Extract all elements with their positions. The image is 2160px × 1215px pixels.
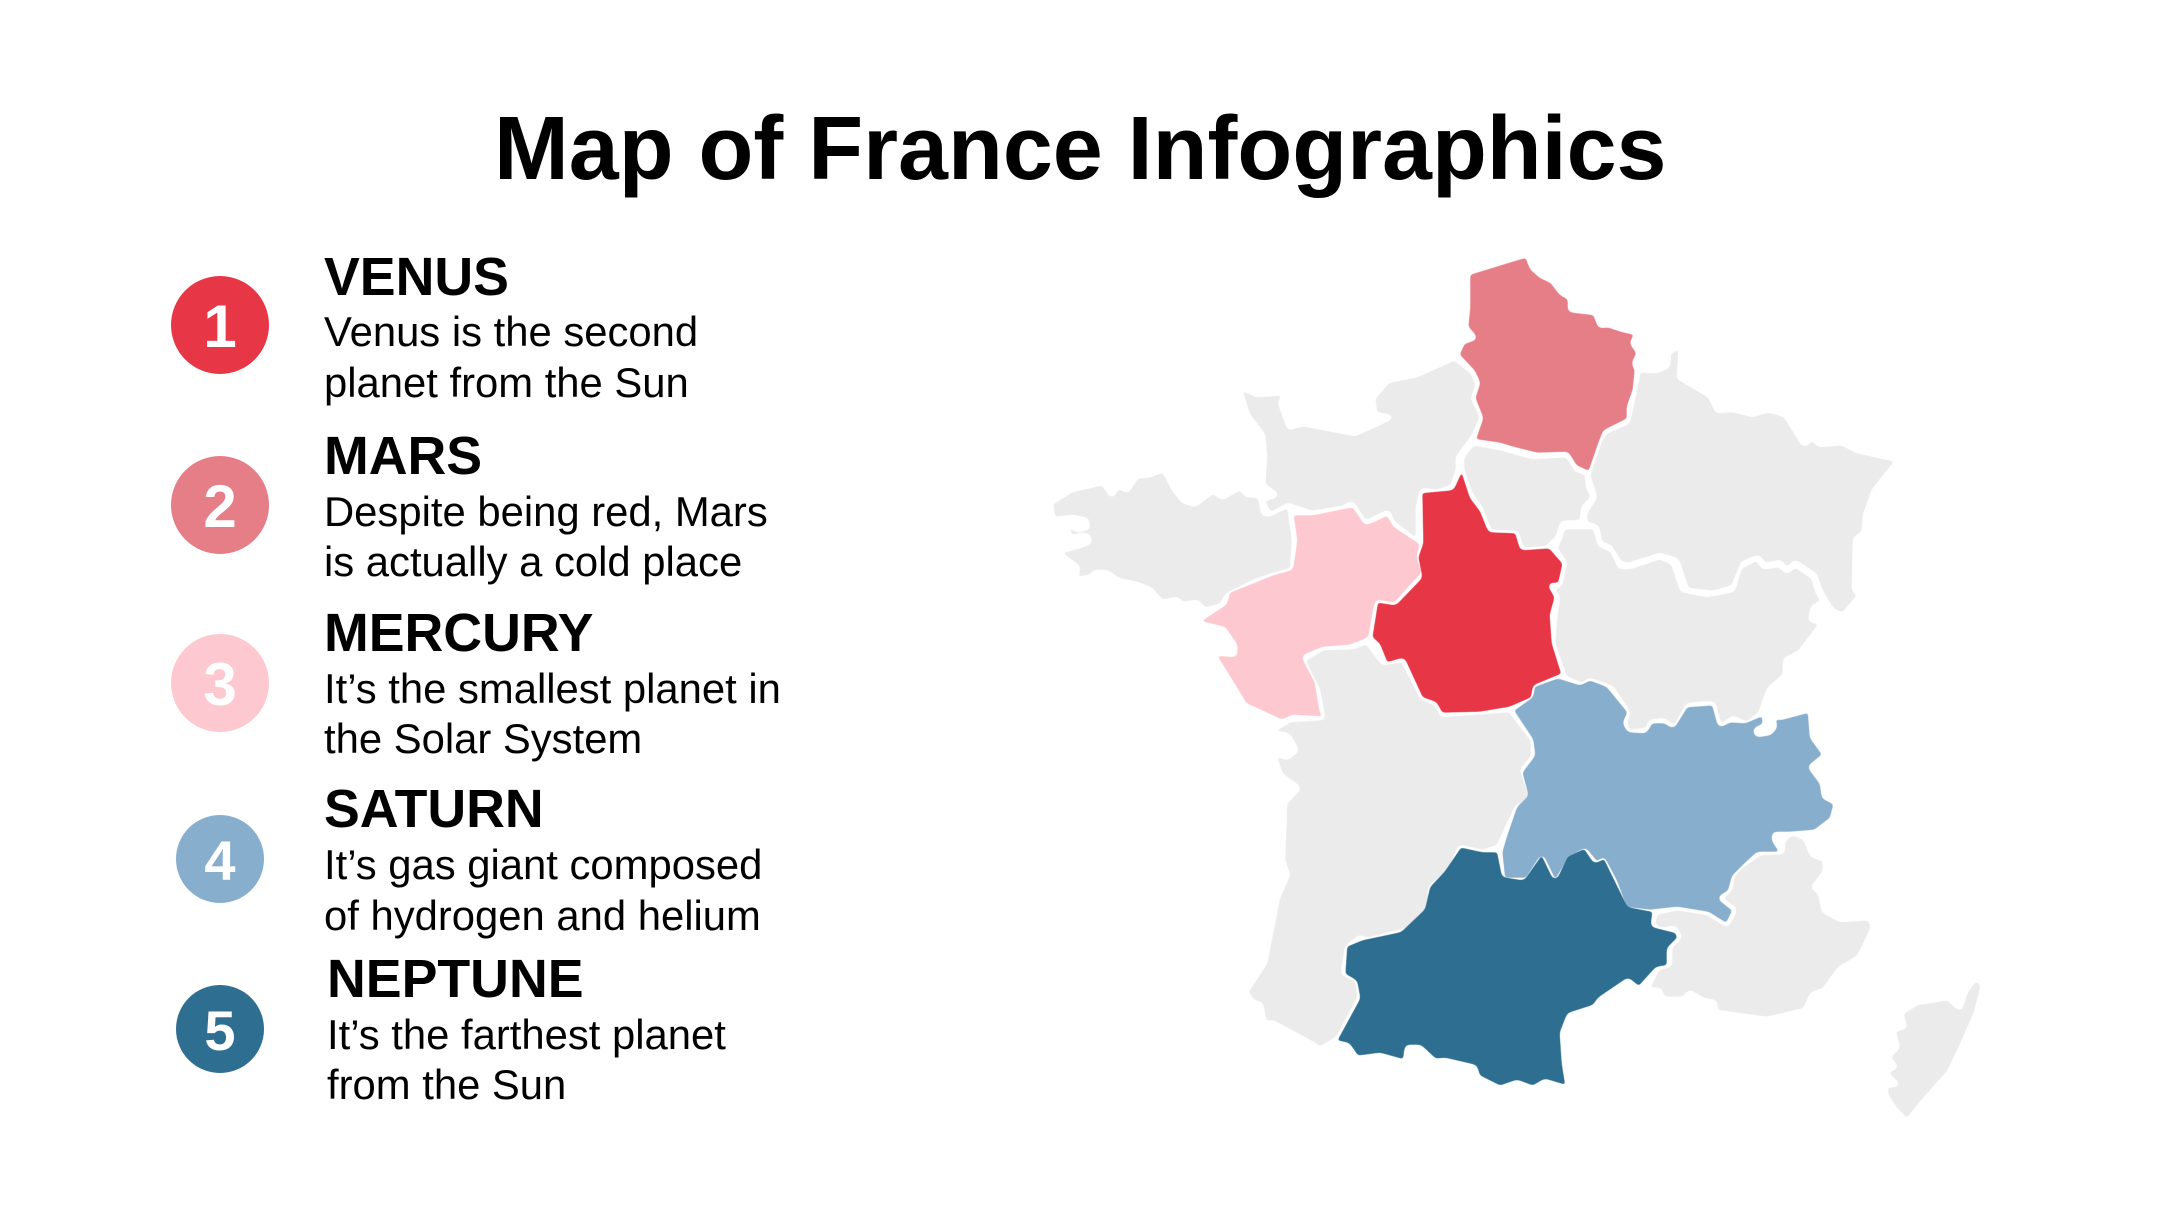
title: Map of France Infographics <box>494 99 1666 199</box>
icon: number 4: 4 <box>204 829 236 892</box>
region: Provence-Alpes-Cote d'Azur <box>1647 833 1873 1019</box>
icon: number 1: 1 <box>203 293 237 360</box>
text: Mercury description: It’s the smallest planet in <box>324 665 781 712</box>
icon: number 4 <box>176 815 264 903</box>
text: Mars description: is actually a cold place <box>324 538 742 585</box>
region: Bourgogne-Franche-Comte <box>1552 527 1823 732</box>
region: Ile-de-France <box>1462 443 1593 550</box>
icon: number 5: 5 <box>204 999 236 1062</box>
region: Centre-Val de Loire (Venus) <box>1370 466 1565 715</box>
heading: Mars: MARS <box>324 426 482 486</box>
region: Auvergne-Rhone-Alpes (Saturn) <box>1500 676 1836 926</box>
region: Grand Est <box>1585 346 1898 615</box>
legend item: Mercury <box>171 603 781 762</box>
heading: Neptune: NEPTUNE <box>327 949 584 1009</box>
heading: Saturn: SATURN <box>324 779 544 839</box>
region: Corsica <box>1885 978 1983 1121</box>
legend item: Venus <box>171 247 698 406</box>
region: Pays de la Loire (Mercury) <box>1196 505 1424 722</box>
legend item: Neptune <box>176 949 726 1108</box>
heading: Mercury: MERCURY <box>324 603 593 663</box>
heading: Venus: VENUS <box>324 247 509 307</box>
icon: number 2 <box>171 456 269 554</box>
icon: number 1 <box>171 276 269 374</box>
text: Neptune description: It’s the farthest planet <box>327 1011 726 1058</box>
icon: number 5 <box>176 985 264 1073</box>
map of France <box>1051 255 1983 1121</box>
text: Venus description: planet from the Sun <box>324 359 689 406</box>
legend item: Saturn <box>176 779 762 939</box>
region: Brittany <box>1051 470 1294 610</box>
text: Venus description: Venus is the second <box>324 308 698 355</box>
icon: number 2: 2 <box>203 473 237 540</box>
region: Hauts-de-France (Mars) <box>1457 255 1639 474</box>
legend item: Mars <box>171 426 768 585</box>
text: Neptune description: from the Sun <box>327 1061 566 1108</box>
text: Mercury description: the Solar System <box>324 715 642 762</box>
region: Occitanie (Neptune) <box>1334 845 1680 1088</box>
text: Mars description: Despite being red, Mars <box>324 488 768 535</box>
text: Saturn description: It’s gas giant composed <box>324 841 762 888</box>
icon: number 3 <box>171 634 269 732</box>
icon: number 3: 3 <box>203 651 237 718</box>
region: Nouvelle-Aquitaine <box>1246 642 1533 1049</box>
text: Saturn description: of hydrogen and helium <box>324 892 761 939</box>
region: Normandy <box>1239 358 1482 542</box>
